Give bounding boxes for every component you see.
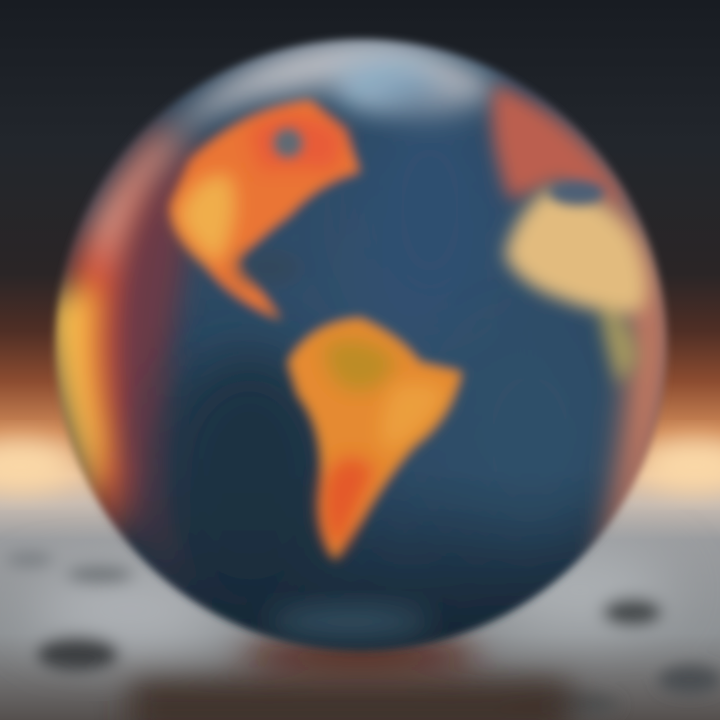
globe: [40, 30, 680, 660]
right rim: warm edge: [555, 116, 673, 559]
South America landmass: [288, 318, 462, 560]
Africa tan landmass: [505, 190, 646, 385]
North America landmass: [170, 100, 360, 320]
left rim: fire reflection bands: [48, 110, 205, 600]
ocean shading: [155, 350, 345, 610]
top highlight cap: [170, 35, 500, 130]
globe base ocean: [40, 30, 680, 660]
ground: grey rocky surface: [6, 550, 720, 720]
Europe / Russia red patch: [492, 85, 625, 205]
